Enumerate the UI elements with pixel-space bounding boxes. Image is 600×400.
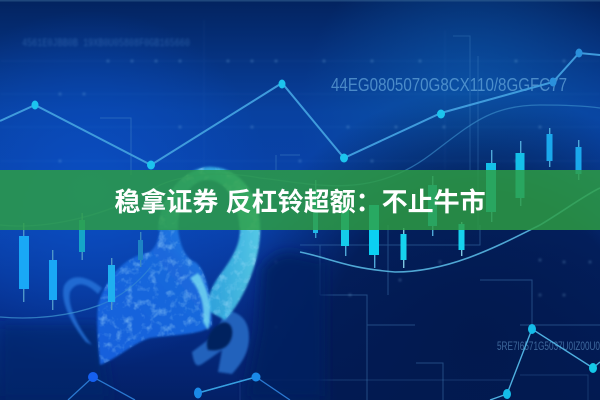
candle 4: [108, 258, 115, 310]
candle 11: [458, 222, 464, 256]
candle 14: [546, 128, 552, 167]
dark region right of blob: [245, 253, 325, 400]
main body: [97, 230, 212, 365]
title band: [0, 170, 600, 230]
faded code text top left: 4561E0JBB0B 19XB0U05808F0GB165660: [22, 38, 190, 50]
upper line chart: [0, 48, 600, 170]
candlestick chart: [19, 128, 582, 310]
circuit lines: [100, 36, 600, 400]
candle 6: [313, 180, 318, 238]
candle 1: [19, 223, 29, 302]
candle 13: [516, 141, 524, 206]
title: 稳拿证券 反杠铃超额：不止牛市: [114, 187, 486, 217]
smooth trend curves: [0, 105, 600, 318]
dark region lower left: [0, 325, 110, 400]
lower left network line: [68, 372, 290, 400]
candle 7: [341, 190, 349, 256]
candle 15: [576, 140, 582, 180]
data points: [32, 48, 582, 170]
candle 2: [49, 250, 57, 310]
dark hole: [207, 322, 232, 350]
candle 9: [400, 228, 406, 268]
ring arc: [158, 167, 260, 320]
network blob: [63, 167, 260, 374]
candle 3: [79, 213, 85, 260]
lower lobe: [192, 310, 249, 374]
left loop: [63, 277, 102, 345]
inner bright ridge: [190, 273, 210, 330]
candle 12: [486, 150, 496, 222]
lower right network line: [490, 324, 600, 400]
data dots texture: [58, 60, 592, 328]
candle 10: [428, 176, 437, 236]
candle 8: [369, 205, 379, 268]
candle 5: [138, 232, 143, 267]
